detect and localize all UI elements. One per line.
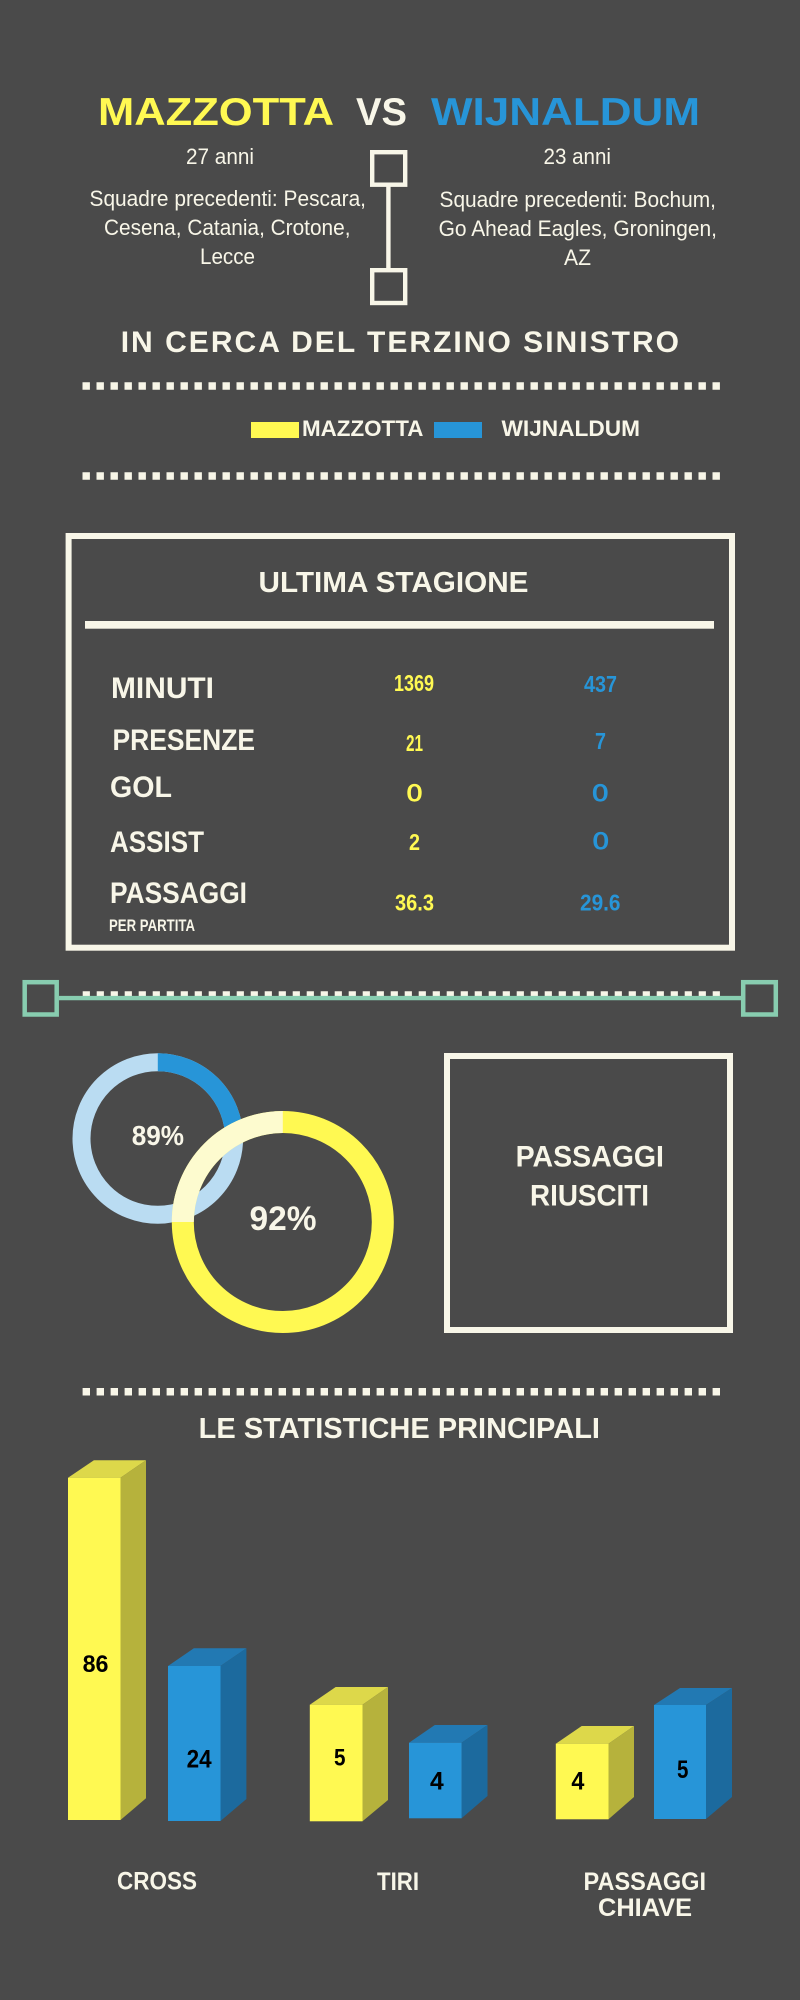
panel: passaggi riusciti (447, 1056, 730, 1330)
bar: cross Wijnaldum 24 (168, 1648, 246, 1821)
text block: Wijnaldum profile: AZ (564, 245, 591, 270)
axis label: passaggi chiave: CHIAVE (598, 1894, 692, 1922)
Mazzotta values: 36.3 (395, 890, 434, 916)
text block: Mazzotta profile: 27 anni (186, 144, 254, 169)
bar chart: main statistics (68, 1460, 732, 1821)
bar: cross Mazzotta 86: 86 (83, 1651, 108, 1678)
panel: passaggi riusciti: PASSAGGI (516, 1141, 664, 1174)
Mazzotta values: 2 (409, 829, 420, 855)
bar: cross Mazzotta 86 (68, 1460, 146, 1820)
title: Mazzotta vs Wijnaldum (98, 91, 700, 134)
bar: tiri Wijnaldum 4 (409, 1725, 488, 1818)
bar: tiri Mazzotta 5: 5 (334, 1745, 346, 1772)
row labels: PER PARTITA (109, 916, 195, 935)
donut: Mazzotta 92% (183, 1122, 383, 1322)
row labels: MINUTI (111, 672, 214, 705)
text block: Wijnaldum profile: 23 anni (544, 144, 611, 169)
heading: ultima stagione: ULTIMA STAGIONE (258, 567, 528, 599)
row labels: GOL (110, 771, 172, 804)
label: 92%: 92% (250, 1200, 316, 1238)
row labels: PASSAGGI (110, 877, 247, 910)
Wijnaldum values: 0 (592, 782, 609, 807)
title: Mazzotta vs Wijnaldum: VS (356, 91, 407, 134)
bar: tiri Mazzotta 5 (310, 1687, 388, 1821)
heading: le statistiche principali: LE STATISTICHE PRINCIPALI (199, 1413, 600, 1445)
Wijnaldum values: 7 (595, 728, 606, 754)
title: Mazzotta vs Wijnaldum: WIJNALDUM (431, 91, 700, 134)
Wijnaldum values: 0 (592, 830, 610, 855)
text block: Wijnaldum profile: Go Ahead Eagles, Groningen, (439, 216, 717, 241)
panel: ultima stagione (69, 536, 732, 948)
bar: passaggi chiave Mazzotta 4 (556, 1726, 634, 1819)
Mazzotta values: 21 (406, 730, 423, 756)
chart: pass accuracy donuts (82, 1062, 383, 1322)
legend (251, 416, 640, 441)
bar: tiri Wijnaldum 4: 4 (430, 1767, 444, 1795)
icon: vertical connector with squares (372, 152, 405, 303)
row labels (109, 672, 255, 935)
donut: Wijnaldum 89% (82, 1062, 234, 1215)
row labels: PRESENZE (112, 724, 255, 757)
Wijnaldum values: 437 (584, 671, 617, 697)
subtitle: in cerca del terzino sinistro: IN CERCA DEL TERZINO SINISTRO (121, 326, 679, 359)
bar: passaggi chiave Wijnaldum 5 (654, 1688, 732, 1819)
label: 89%: 89% (132, 1120, 184, 1151)
text block: Mazzotta profile: Cesena, Catania, Crotone, (104, 215, 350, 240)
axis label: cross: CROSS (117, 1867, 197, 1895)
bar: passaggi chiave Wijnaldum 5: 5 (677, 1756, 688, 1784)
divider: green connector with squares (25, 982, 776, 1014)
Wijnaldum values: 29.6 (580, 890, 620, 916)
Mazzotta values (394, 670, 434, 916)
text block: Mazzotta profile: Squadre precedenti: Pescara, (90, 186, 366, 211)
bar: cross Wijnaldum 24: 24 (187, 1746, 212, 1774)
Wijnaldum values (580, 671, 620, 916)
legend: MAZZOTTA (302, 416, 424, 441)
axis label: passaggi chiave: PASSAGGI (584, 1868, 706, 1896)
text block: Wijnaldum profile (439, 144, 717, 270)
text block: Mazzotta profile: Lecce (200, 244, 255, 269)
row labels: ASSIST (110, 826, 204, 859)
text block: Mazzotta profile (90, 144, 366, 269)
bar: passaggi chiave Mazzotta 4: 4 (571, 1767, 584, 1795)
axis label: tiri: TIRI (377, 1868, 419, 1896)
text block: Wijnaldum profile: Squadre precedenti: Bochum, (440, 187, 716, 212)
legend: WIJNALDUM (502, 416, 640, 441)
title: Mazzotta vs Wijnaldum: MAZZOTTA (98, 91, 334, 134)
panel: passaggi riusciti: RIUSCITI (530, 1180, 649, 1213)
Mazzotta values: 0 (406, 782, 423, 807)
axis label: passaggi chiave (584, 1868, 706, 1922)
Mazzotta values: 1369 (394, 670, 434, 696)
